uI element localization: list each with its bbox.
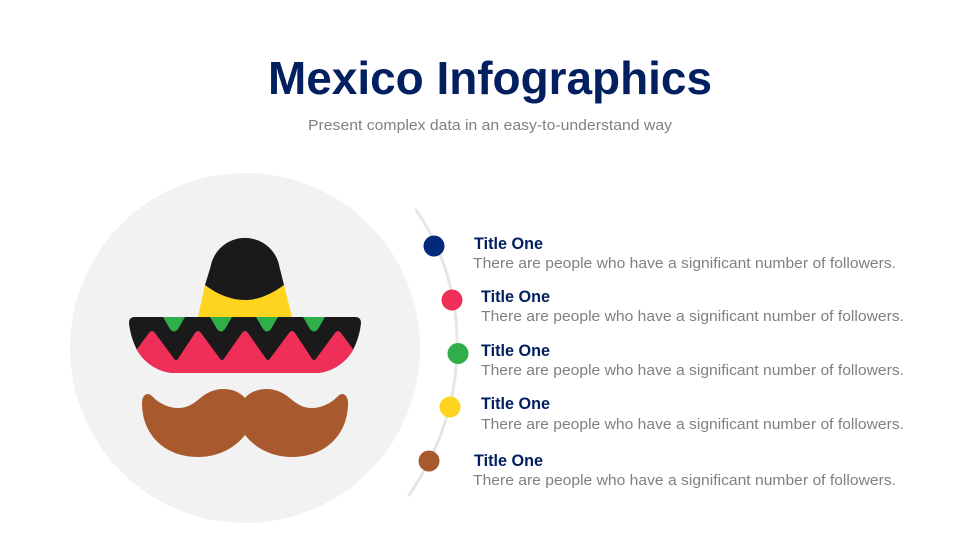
brim green triangles <box>163 317 325 332</box>
hat crown <box>205 238 284 300</box>
item 3 description: There are people who have a significant number of followers. <box>481 362 904 379</box>
item 5 heading: Title One <box>474 452 543 470</box>
timeline item 2 <box>442 288 904 325</box>
item 1 heading: Title One <box>474 235 543 253</box>
hat brim <box>129 317 361 373</box>
timeline item 4 <box>440 395 904 433</box>
item 2 heading: Title One <box>481 288 550 306</box>
subtitle: Present complex data in an easy-to-understand way <box>308 117 673 134</box>
timeline arc <box>409 210 457 495</box>
marker: brown dot <box>418 450 440 472</box>
timeline item 1 <box>424 235 896 272</box>
background circle <box>70 173 420 523</box>
marker: yellow dot <box>440 396 460 418</box>
item 1 description: There are people who have a significant number of followers. <box>473 255 896 272</box>
item 2 description: There are people who have a significant number of followers. <box>481 308 904 325</box>
marker: green dot <box>448 343 468 364</box>
item 5 description: There are people who have a significant number of followers. <box>473 472 896 489</box>
timeline item 5 <box>418 450 896 489</box>
infographic canvas <box>70 60 903 523</box>
item 3 heading: Title One <box>481 342 550 360</box>
timeline item 3 <box>448 342 904 379</box>
marker: navy dot <box>424 236 444 256</box>
item 4 heading: Title One <box>481 395 550 413</box>
title: Mexico Infographics <box>268 52 712 104</box>
hat band <box>198 285 292 317</box>
icon: sombrero hat <box>129 238 361 373</box>
icon: moustache <box>142 389 348 457</box>
item 4 description: There are people who have a significant number of followers. <box>481 416 904 433</box>
brim red zigzag <box>136 331 354 373</box>
marker: red dot <box>442 290 462 310</box>
